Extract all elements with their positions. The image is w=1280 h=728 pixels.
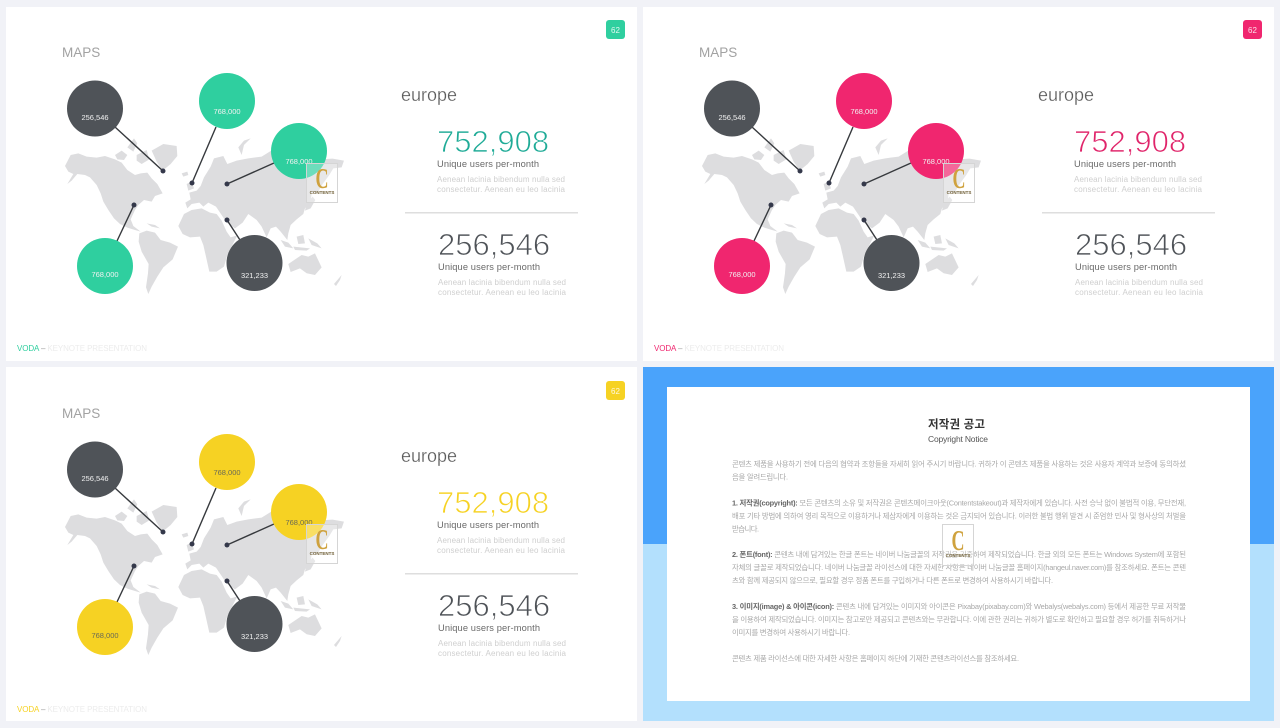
circle: 321,233: 321,233: [878, 271, 905, 280]
circle: 768,000 top: [199, 73, 255, 129]
notice section 3: images and icons: 이미지를 변경하여 사용하시기 바랍니다.: [732, 628, 850, 637]
circle: 256,546: [704, 80, 760, 136]
stat: 256,546: 256,546: [438, 227, 550, 262]
region title: europe: [1038, 85, 1094, 105]
stat: 752,908: Unique users per-month: [437, 159, 539, 169]
stat: 752,908: 752,908: [437, 485, 549, 520]
notice title: 저작권 공고: [928, 417, 985, 431]
circle: 256,546: [67, 442, 123, 498]
circle: 768,000 right: 768,000: [285, 157, 313, 166]
stat: 256,546: Aenean lacinia bibendum nulla sed: [438, 639, 566, 648]
stat: 256,546: [438, 227, 567, 297]
circle: 768,000 bottom: [77, 238, 133, 294]
watermark: C: [953, 164, 965, 195]
circle: 768,000 bottom: 768,000: [91, 631, 119, 640]
panel: teal maps slide: [6, 7, 637, 361]
watermark: CONTENTS: [946, 553, 970, 558]
notice subtitle: Copyright Notice: [928, 434, 988, 444]
circle: 321,233: 321,233: [241, 271, 268, 280]
stat: 752,908: consectetur. Aenean eu leo lacinia: [437, 546, 566, 555]
stat: 752,908: Aenean lacinia bibendum nulla sed: [437, 536, 565, 545]
circle: 321,233: [864, 235, 920, 291]
notice intro: 음을 알려드립니다.: [732, 472, 788, 482]
region title: europe: [401, 446, 457, 466]
circle: 768,000 top: [836, 73, 892, 129]
world map: [702, 138, 981, 294]
circle: 768,000 top: 768,000: [213, 107, 241, 116]
page badge: 62: [611, 387, 620, 396]
stat: 256,546: 256,546: [1075, 227, 1187, 262]
stat: 752,908: Aenean lacinia bibendum nulla sed: [437, 175, 565, 184]
region title: europe: [401, 85, 457, 105]
watermark: C: [952, 526, 964, 557]
page badge: [1243, 20, 1262, 39]
stat: 752,908: [437, 485, 566, 555]
watermark: [306, 164, 338, 202]
page badge: [606, 381, 625, 400]
notice section 1: copyright: 1. 저작권(copyright): 모든 콘텐츠의 소유 및 저작권은 콘텐츠메이크아웃(Contentstakeout)과 제작자에게 있습니다. 사전 승낙 없이 불법적 이용, 무단전재,: [732, 498, 1186, 508]
footer: VODA – KEYNOTE PRESENTATION: [17, 344, 147, 353]
stat: 752,908: 752,908: [1074, 124, 1186, 159]
leader lines: [115, 488, 274, 602]
heading: maps: MAPS: [62, 45, 100, 60]
stat: 256,546: Unique users per-month: [1075, 262, 1177, 272]
circle: 256,546: 256,546: [81, 474, 109, 483]
notice closing line: 콘텐츠 제품 라이선스에 대한 자세한 사항은 홈페이지 하단에 기재한 콘텐츠라이선스를 참조하세요.: [732, 654, 1019, 663]
footer: VODA – KEYNOTE PRESENTATION: [654, 344, 784, 353]
heading: maps: MAPS: [62, 406, 100, 421]
watermark: CONTENTS: [310, 551, 334, 556]
notice section 3: images and icons: [732, 602, 1186, 637]
circle: 256,546: [67, 80, 123, 136]
stat: 752,908: [437, 124, 566, 194]
notice section 2: font: [732, 550, 1186, 585]
page badge: 62: [1248, 26, 1257, 35]
circle: 768,000 right: [271, 123, 327, 179]
circle: 768,000 top: 768,000: [213, 468, 241, 477]
leader lines: [752, 127, 911, 241]
stat: 752,908: 752,908: [437, 124, 549, 159]
notice intro: 콘텐츠 제품을 사용하기 전에 다음의 협약과 조항들을 자세히 읽어 주시기 바랍니다. 귀하가 이 콘텐츠 제품을 사용하는 것은 사용자 계약과 보증에 동의하셨: [732, 460, 1186, 468]
notice section 1: copyright: 받습니다.: [732, 524, 759, 534]
panel: pink maps slide: [643, 7, 1274, 361]
watermark: CONTENTS: [947, 190, 971, 195]
circle: 321,233: [226, 596, 282, 652]
stat: 752,908: consectetur. Aenean eu leo lacinia: [437, 185, 566, 194]
map dots: [768, 168, 866, 222]
page badge: [606, 20, 625, 39]
page badge: 62: [611, 26, 620, 35]
notice section 2: font: 츠와 함께 제공되지 않으므로, 필요할 경우 정품 폰트를 구입하거나 다른 폰트로 변경하여 사용하시기 바랍니다.: [732, 576, 1053, 585]
stat: 752,908: Unique users per-month: [1074, 159, 1176, 169]
map dots: [132, 530, 230, 584]
circle: 321,233: [226, 235, 282, 291]
stat: 256,546: [438, 588, 567, 658]
leader lines: [115, 127, 274, 241]
circle: 768,000 bottom: 768,000: [91, 270, 119, 279]
watermark: C: [316, 525, 328, 556]
stat: 256,546: 256,546: [438, 588, 550, 623]
notice section 2: font: 2. 폰트(font): 콘텐츠 내에 담겨있는 한글 폰트는 네이버 나눔글꼴의 저작권을 기증하여 제작되었습니다. 한글 외의 모든 폰트는 Windows System에 포함된: [732, 550, 1186, 559]
notice intro: [732, 460, 1186, 482]
notice section 3: images and icons: 3. 이미지(image) & 아이콘(icon): 콘텐츠 내에 담겨있는 이미지와 아이콘은 Pixabay(pixabay.com)와 Webalys(webalys.com) 등에서 제공한 무료 저작물: [732, 602, 1186, 611]
watermark: CONTENTS: [310, 190, 334, 195]
stat: 256,546: consectetur. Aenean eu leo lacinia: [438, 288, 567, 297]
watermark: C: [316, 164, 328, 195]
circle: 768,000 right: [271, 484, 327, 540]
circle: 256,546: 256,546: [718, 113, 746, 122]
stat: 256,546: consectetur. Aenean eu leo lacinia: [438, 649, 567, 658]
stat: 752,908: Aenean lacinia bibendum nulla sed: [1074, 175, 1202, 184]
stat: 752,908: Unique users per-month: [437, 520, 539, 530]
circle: 768,000 bottom: [714, 238, 770, 294]
heading: maps: MAPS: [699, 45, 737, 60]
panel: yellow maps slide: [6, 367, 637, 721]
circle: 768,000 bottom: 768,000: [728, 270, 756, 279]
stat: 256,546: [1075, 227, 1204, 297]
map dots: [132, 168, 230, 222]
world map: [65, 138, 344, 294]
circle: 768,000 right: [908, 123, 964, 179]
notice section 2: font: 자체의 글꼴로 제작되었습니다. 네이버 나눔글꼴 라이선스에 대한 자세한 사항은 네이버 나눔글꼴 홈페이지(hangeul.naver.com)를 참조하세요. 폰트는 콘텐: [732, 563, 1186, 572]
stat: 256,546: Aenean lacinia bibendum nulla sed: [1075, 278, 1203, 287]
footer: VODA – KEYNOTE PRESENTATION: [17, 705, 147, 714]
world map: [65, 499, 344, 655]
notice section 3: images and icons: 을 이용하여 제작되었습니다. 이미지는 참고로만 제공되고 콘텐츠와는 무관합니다. 이에 관한 권리는 귀하가 별도로 확인하고 필요할 경우 허가를 취득하거나: [732, 615, 1186, 624]
circle: 321,233: 321,233: [241, 632, 268, 641]
stat: 256,546: Aenean lacinia bibendum nulla sed: [438, 278, 566, 287]
stat: 752,908: [1074, 124, 1203, 194]
circle: 256,546: 256,546: [81, 113, 109, 122]
circle: 768,000 top: [199, 434, 255, 490]
notice section 1: copyright: [732, 498, 1186, 534]
stat: 256,546: consectetur. Aenean eu leo lacinia: [1075, 288, 1204, 297]
stat: 256,546: Unique users per-month: [438, 262, 540, 272]
watermark: [944, 164, 974, 202]
circle: 768,000 top: 768,000: [850, 107, 878, 116]
circle: 768,000 right: 768,000: [285, 518, 313, 527]
stat: 752,908: consectetur. Aenean eu leo lacinia: [1074, 185, 1203, 194]
watermark: [306, 524, 338, 564]
circle: 768,000 bottom: [77, 599, 133, 655]
panel: copyright notice: [643, 367, 1274, 721]
watermark: [942, 524, 974, 566]
circle: 768,000 right: 768,000: [922, 157, 950, 166]
stat: 256,546: Unique users per-month: [438, 623, 540, 633]
notice section 1: copyright: 배포 기타 방법에 의하여 영리 목적으로 이용하거나 제삼자에게 이용하는 것은 금지되어 있습니다. 이러한 불법 행위 발견 시 준엄한 민사 및 형사상의 처벌을: [732, 512, 1186, 520]
